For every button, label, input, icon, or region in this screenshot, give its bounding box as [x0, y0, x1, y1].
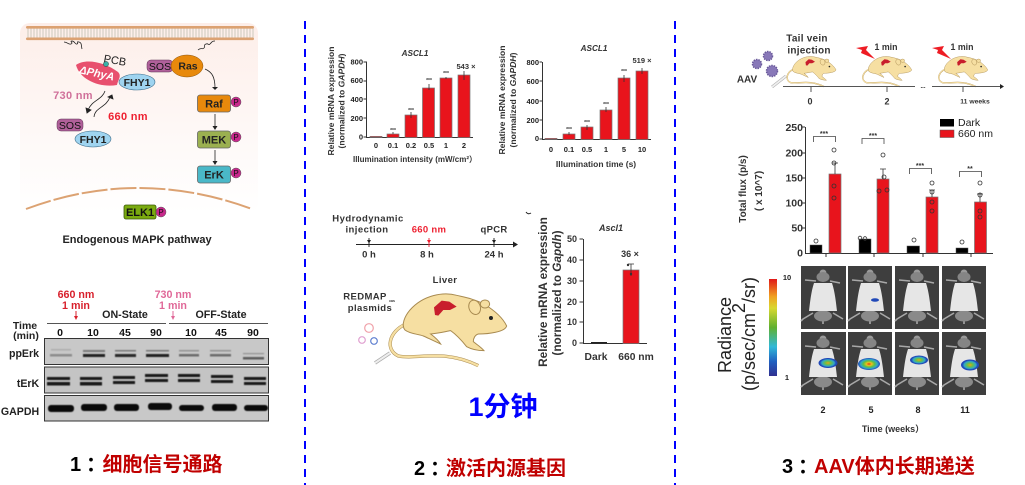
Raf: P — [233, 98, 239, 107]
chart: Ascl1 liver — [536, 217, 654, 367]
chart: ASCL1 vs intensity: ASCL1 — [401, 49, 429, 58]
730 nm label: 730 nm — [53, 90, 93, 102]
ON-State header: ON-State — [102, 309, 148, 321]
time points: 90 — [247, 327, 259, 339]
FHY1 free: FHY1 — [80, 134, 107, 146]
timeline: AAV injection: 1 min — [951, 42, 973, 52]
chart: ASCL1 vs intensity: 800 — [350, 58, 363, 66]
mouse illustration: liver: REDMAP — [343, 292, 387, 302]
timeline: hydrodynamic injection: qPCR — [480, 224, 508, 236]
730 nm annotation: 1 min — [159, 300, 187, 312]
chart: Ascl1 liver: Dark — [585, 352, 608, 363]
chart: ASCL1 vs intensity: 0 — [359, 132, 363, 142]
FHY1 bound — [119, 74, 155, 90]
timeline: AAV injection: 1 min — [875, 42, 897, 52]
chart: total flux: *** — [916, 163, 924, 170]
chart: ASCL1 vs intensity: Illumination intensity (mW/cm²） — [353, 155, 477, 164]
heading 2: 2 — [414, 458, 425, 480]
time points: 10 — [87, 327, 99, 339]
timeline: AAV injection: 2 — [884, 96, 890, 106]
660 nm annotation: 1 min — [62, 300, 90, 312]
colour scale — [769, 273, 791, 382]
730 nm annotation — [155, 289, 191, 320]
chart: ASCL1 vs time: 0 — [549, 145, 553, 154]
chart: total flux: 50 — [791, 222, 803, 234]
virus particles — [752, 52, 778, 76]
GAPDH blot — [44, 396, 268, 421]
chart: ASCL1 vs time: 10 — [638, 145, 646, 154]
ΔPhyA protein: ΔPhyA — [77, 64, 115, 84]
chart: Ascl1 liver: 30 — [567, 276, 577, 286]
label: Radiance: Radiance — [715, 297, 735, 373]
nuclear membrane — [26, 188, 252, 209]
chart: ASCL1 vs time: *** — [584, 120, 590, 126]
chart: Ascl1 liver: Ascl1 — [598, 223, 623, 233]
label: radiance units: /sr) — [739, 277, 759, 303]
chart: ASCL1 vs intensity: (normalized to GAPDH) — [336, 53, 346, 149]
mouse illustration: liver: Liver — [433, 275, 457, 286]
chart: ASCL1 vs time: 200 — [526, 116, 539, 125]
chart: Ascl1 liver: 0 — [572, 338, 577, 348]
timeline: hydrodynamic injection: 660 nm — [412, 224, 446, 236]
chart: ASCL1 vs intensity: *** — [426, 78, 432, 84]
chart: ASCL1 vs time — [497, 44, 652, 169]
week labels: 11 — [960, 405, 970, 415]
chart: ASCL1 vs time: *** — [566, 127, 572, 133]
callout: 1 minute: 1分钟 — [468, 392, 538, 422]
MEK: P — [233, 133, 239, 142]
Ras — [171, 55, 203, 77]
ELK1 — [124, 205, 166, 219]
chart: Ascl1 liver: Relative mRNA expression — [536, 217, 550, 367]
chart: Ascl1 liver: 660 nm — [618, 352, 654, 363]
chart: ASCL1 vs intensity: 1 — [444, 141, 448, 150]
timeline: hydrodynamic injection: injection — [345, 224, 389, 236]
timeline: AAV injection: 11 weeks — [960, 98, 990, 106]
chart: ASCL1 vs time: 400 — [526, 97, 539, 106]
730 nm annotation: 730 nm — [155, 289, 191, 301]
timeline: hydrodynamic injection: Hydrodynamic — [332, 214, 404, 224]
ELK1: ELK1 — [126, 207, 154, 219]
660 nm annotation — [58, 289, 94, 320]
Raf: Raf — [205, 98, 223, 110]
time points: 45 — [215, 327, 227, 339]
heading 2: 激活内源基因 — [446, 457, 566, 480]
660 nm label: 660 nm — [108, 111, 148, 123]
divider: left dashed line — [304, 21, 306, 485]
ErK — [198, 166, 241, 183]
chart: total flux: Total flux (p/s) — [738, 155, 749, 223]
caption: Endogenous MAPK pathway: Endogenous MAPK pathway — [62, 234, 212, 246]
chart: ASCL1 vs time: 600 — [526, 77, 539, 86]
chart: ASCL1 vs time: 1 — [604, 145, 608, 154]
ΔPhyA protein — [76, 61, 120, 86]
chart: ASCL1 vs intensity: 0.2 — [406, 141, 416, 150]
heading 1: 1 — [70, 454, 81, 476]
arrow Ras to Raf — [205, 69, 218, 90]
time points: 0 — [57, 327, 63, 339]
cell membrane — [26, 26, 254, 40]
chart: ASCL1 vs intensity — [326, 46, 477, 164]
chart: ASCL1 vs time: 0 — [535, 134, 539, 143]
label: radiance units: 2 — [729, 303, 749, 313]
week labels: 8 — [915, 405, 921, 415]
heading 3: AAV体内长期递送 — [814, 455, 975, 478]
week labels — [820, 405, 970, 415]
SOS free: SOS — [59, 120, 81, 132]
lightning — [856, 46, 875, 59]
chart: Ascl1 liver: 20 — [567, 297, 577, 307]
timeline: AAV injection — [737, 34, 1004, 106]
tErK blot — [44, 367, 268, 393]
time points: 90 — [150, 327, 162, 339]
Ras: Ras — [178, 60, 198, 72]
chart: total flux: 200 — [785, 148, 803, 160]
ppErk blot — [44, 338, 268, 364]
MEK: MEK — [202, 134, 226, 146]
colour scale: 10 — [783, 273, 791, 282]
timeline: AAV injection: ... — [920, 84, 926, 90]
chart: Ascl1 liver: 36 × — [621, 249, 639, 259]
reversible arrows — [86, 91, 113, 117]
heading 1: ： — [86, 454, 106, 476]
chart: ASCL1 vs intensity: *** — [443, 71, 449, 77]
chart: total flux — [738, 117, 993, 260]
ELK1: P — [158, 208, 164, 217]
chart: ASCL1 vs time: 519 × — [633, 56, 652, 65]
mark at chart corner — [526, 212, 531, 214]
week labels: 5 — [868, 405, 874, 415]
panel: western blot — [1, 289, 268, 421]
chart: ASCL1 vs intensity: *** — [390, 128, 396, 134]
heading 2: ： — [430, 458, 450, 480]
chart: total flux: *** — [820, 131, 828, 138]
chart: ASCL1 vs intensity: 200 — [350, 114, 363, 123]
blot labels: ppErk — [9, 348, 39, 360]
chart: ASCL1 vs time: 5 — [622, 145, 626, 154]
panel: western blot: GAPDH — [1, 406, 39, 418]
chart: ASCL1 vs intensity: 543 × — [457, 62, 476, 71]
legend — [940, 117, 993, 140]
ErK: ErK — [204, 170, 224, 182]
chart: ASCL1 vs intensity: *** — [408, 108, 414, 114]
chart: ASCL1 vs time: *** — [621, 69, 627, 75]
chart: Ascl1 liver: 40 — [567, 255, 577, 265]
chart: ASCL1 vs intensity: 0.5 — [424, 141, 434, 150]
timeline: AAV injection: AAV — [737, 74, 758, 86]
chart: total flux: 150 — [785, 172, 803, 184]
heading 3: 3 — [782, 456, 793, 478]
chart: ASCL1 vs time: 800 — [526, 58, 539, 67]
panel: western blot: (min) — [13, 330, 39, 342]
panel: western blot: tErK — [17, 378, 40, 390]
panel: MAPK pathway diagram — [20, 23, 258, 219]
Time label: Time — [13, 320, 37, 332]
divider: right dashed line — [674, 21, 676, 485]
mouse illustration: liver: cas — [389, 299, 395, 303]
MEK — [198, 131, 241, 148]
chart: ASCL1 vs time: Relative mRNA expression — [497, 45, 507, 155]
chart: total flux: 0 — [797, 248, 803, 260]
chart: total flux: *** — [869, 133, 877, 140]
chart: ASCL1 vs intensity: Relative mRNA expression — [326, 46, 336, 156]
chart: total flux: 250 — [785, 122, 803, 134]
FHY1 free — [75, 131, 111, 147]
chart: ASCL1 vs intensity: 600 — [350, 76, 363, 85]
chart: ASCL1 vs time: *** — [603, 102, 609, 108]
chart: total flux: 100 — [785, 198, 803, 210]
chart: ASCL1 vs time: 0.5 — [582, 145, 592, 154]
colour scale: 1 — [785, 373, 789, 382]
timeline: AAV injection: 0 — [807, 96, 813, 106]
chart: Ascl1 liver: (normalized to Gapdh) — [550, 230, 564, 356]
mouse illustration: liver — [343, 275, 507, 366]
chart: total flux: ( x 10^7) — [754, 171, 765, 211]
ErK: P — [233, 169, 239, 178]
OFF-State header: OFF-State — [195, 309, 247, 321]
mouse illustration: liver: plasmids — [348, 303, 392, 314]
heading 3: ： — [798, 456, 818, 478]
time points — [57, 327, 259, 339]
legend: 660 nm — [958, 128, 993, 140]
timeline: hydrodynamic injection — [332, 214, 518, 260]
label: radiance units: (p/sec/cm — [739, 313, 759, 391]
chart: ASCL1 vs intensity: 2 — [462, 141, 466, 150]
axis title: time: Time (weeks） — [862, 424, 924, 434]
heading 1: 细胞信号通路 — [102, 453, 222, 476]
timeline: AAV injection: Tail vein — [786, 34, 828, 44]
chart: ASCL1 vs time: 0.1 — [564, 145, 574, 154]
bioluminescence images — [801, 266, 986, 395]
timeline: hydrodynamic injection: 24 h — [484, 250, 504, 260]
FHY1 bound: FHY1 — [124, 77, 151, 89]
timeline: AAV injection: injection — [787, 46, 831, 56]
SOS bound: SOS — [149, 61, 171, 73]
chart: ASCL1 vs intensity: 400 — [350, 95, 363, 104]
week labels: 2 — [820, 405, 826, 415]
chart: ASCL1 vs time: ASCL1 — [580, 44, 608, 53]
timeline: hydrodynamic injection: 8 h — [420, 250, 434, 260]
chart: ASCL1 vs time: Illumination time (s) — [556, 159, 636, 169]
timeline: hydrodynamic injection: 0 h — [362, 250, 376, 260]
Raf — [198, 95, 241, 112]
chart: ASCL1 vs time: (normalized to GAPDH) — [508, 52, 518, 148]
chart: Ascl1 liver: 50 — [567, 234, 577, 244]
time points: 45 — [119, 327, 131, 339]
chart: Ascl1 liver: 10 — [567, 317, 577, 327]
PCB label: PCB — [103, 53, 127, 69]
chart: ASCL1 vs intensity: 0 — [374, 141, 378, 150]
660 nm annotation: 660 nm — [58, 289, 94, 301]
legend: Dark — [958, 117, 981, 129]
chart: ASCL1 vs intensity: 0.1 — [388, 141, 398, 150]
time points: 10 — [185, 327, 197, 339]
chart: total flux: ** — [967, 166, 973, 173]
